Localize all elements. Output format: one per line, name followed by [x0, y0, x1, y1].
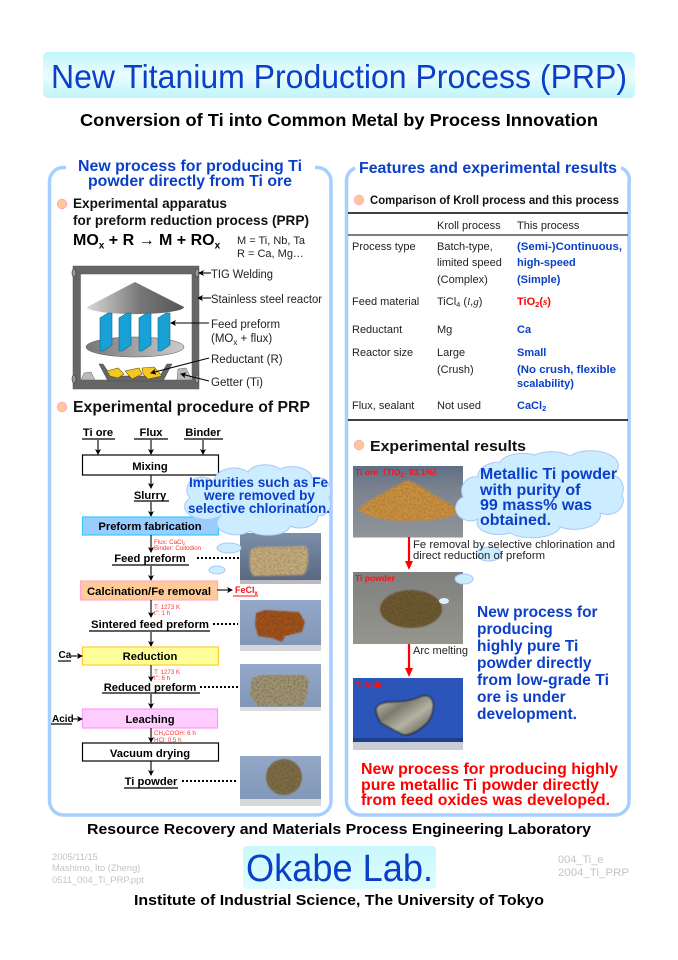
comparison table: Reactor size — [352, 347, 413, 359]
reactor diagram: + flux) — [237, 333, 272, 345]
comparison table: l,g) — [467, 296, 482, 308]
reactor diagram: Getter (Ti) — [211, 377, 263, 389]
panel heading — [78, 158, 302, 190]
flow chart: Ti ore — [83, 427, 113, 439]
photo: Ti powder — [353, 572, 463, 644]
flow chart: Acid — [52, 714, 74, 725]
flow chart: Leaching — [125, 714, 175, 726]
caption: Fe removal: direct reduction of preform — [413, 550, 545, 562]
text: process under development: highly pure Ti — [477, 638, 578, 655]
element key — [237, 235, 306, 260]
comparison table: Ca — [517, 324, 532, 336]
reaction equation: x — [215, 240, 221, 252]
laboratory name: Resource Recovery and Materials Process Engineering Laboratory — [87, 821, 592, 838]
element key: R = Ca, Mg… — [237, 248, 304, 260]
comparison table: 2 — [542, 404, 546, 413]
arrow: ore to powder — [405, 537, 413, 570]
callout: purity result: Metallic Ti powder — [480, 466, 617, 483]
procedure heading: Experimental procedure of PRP — [73, 399, 310, 416]
comparison table: (Simple) — [517, 274, 561, 286]
apparatus heading — [73, 195, 309, 228]
comparison table: Not used — [437, 400, 481, 412]
flow chart: Reduced preform — [104, 682, 196, 694]
title banner: New Titanium Production Process (PRP) — [51, 58, 627, 95]
caption: arc melting: Arc melting — [413, 645, 468, 657]
callout: purity result: obtained. — [480, 512, 551, 529]
comparison table: CaCl — [517, 400, 542, 412]
photo: Ti ore: : 93.1%） — [404, 467, 442, 477]
comparison table: TiO — [517, 296, 535, 308]
bullet — [57, 402, 67, 412]
comparison table: scalability) — [517, 378, 574, 390]
element key: M = Ti, Nb, Ta — [237, 235, 306, 247]
flow chart: T: 1273 K — [154, 604, 181, 611]
comparison table: Small — [517, 347, 546, 359]
panel: new process for producing Ti powder — [50, 158, 331, 815]
comparison table: s) — [543, 296, 551, 308]
reactor diagram: x — [233, 338, 237, 347]
flow chart: t'': 6 h — [154, 675, 171, 682]
file notes left: 2005/11/15 — [52, 852, 98, 862]
panel heading: New process for producing Ti — [78, 158, 302, 175]
comparison table: TiCl — [437, 296, 456, 308]
text: process under development — [477, 604, 609, 723]
callout: purity result — [456, 451, 623, 538]
flow chart: Slurry — [134, 490, 167, 502]
institute name: Institute of Industrial Science, The University of Tokyo — [134, 892, 544, 909]
reactor diagram: (MO — [211, 333, 233, 345]
bullet — [354, 195, 364, 205]
results heading: Experimental results — [370, 438, 526, 455]
flow chart: Feed preform — [114, 553, 186, 565]
text: process under development: New process for — [477, 604, 598, 621]
conclusion text: New process for producing highly — [361, 761, 618, 778]
Okabe Lab banner: Okabe Lab. — [246, 848, 433, 890]
reaction equation: + R — [104, 232, 139, 249]
comparison table: 4 — [456, 300, 460, 309]
comparison table: Mg — [437, 324, 452, 336]
flow chart: Flux: CaCl — [154, 539, 183, 546]
arrow: powder to bulk — [405, 644, 413, 677]
callout: selective chlorination: selective chlorination. — [188, 501, 330, 516]
file notes right: 2004_Ti_PRP — [558, 867, 629, 879]
caption: Fe removal — [413, 539, 615, 562]
text: process under development: from low-grade Ti — [477, 672, 609, 689]
flow chart: HCl: 0.5 h — [154, 737, 182, 744]
flow chart: Mixing — [132, 461, 168, 473]
file notes left — [52, 852, 144, 885]
comparison table — [348, 213, 628, 420]
flow chart: Binder: Collodion — [154, 545, 202, 552]
flow chart: x — [255, 591, 259, 597]
callout: selective chlorination — [185, 465, 331, 574]
callout: selective chlorination: were removed by — [203, 488, 315, 503]
bullet — [57, 199, 67, 209]
panel heading: Features and experimental results — [359, 160, 617, 177]
flow chart: Preform fabrication — [98, 521, 202, 533]
comparison table: limited speed — [437, 257, 502, 269]
comparison table: Large — [437, 347, 465, 359]
comparison table: This process — [517, 220, 580, 232]
file notes left: 0511_004_Ti_PRP.ppt — [52, 875, 144, 885]
flow chart: T: 1273 K — [154, 669, 181, 676]
comparison heading: Comparison of Kroll process and this process — [370, 195, 619, 207]
reactor diagram: TIG Welding — [211, 269, 273, 281]
conclusion text: pure metallic Ti powder directly — [361, 777, 599, 794]
reaction equation: → M + RO — [139, 232, 215, 249]
caption: Fe removal: Fe removal by selective chlorination and — [413, 539, 615, 551]
comparison table: (Crush) — [437, 364, 474, 376]
photo: Ti ore — [353, 466, 463, 538]
text: process under development: development. — [477, 706, 577, 723]
comparison table: high-speed — [517, 257, 576, 269]
flow chart: Calcination/Fe removal — [87, 586, 211, 598]
subtitle: Conversion of Ti into Common Metal by Process Innovation — [80, 110, 598, 130]
file notes right: 004_Ti_e — [558, 854, 603, 866]
flow chart: Reduction — [123, 651, 178, 663]
apparatus heading: Experimental apparatus — [73, 195, 227, 211]
panel heading: powder directly from Ti ore — [88, 173, 292, 190]
reactor diagram: Feed preform — [211, 319, 280, 331]
comparison table: Flux, sealant — [352, 400, 414, 412]
photo: Ti powder: Ti powder — [355, 573, 396, 583]
photo: reduced preform — [240, 664, 321, 711]
text: process under development: ore is under — [477, 689, 566, 706]
comparison table: Batch-type, — [437, 241, 493, 253]
text: process under development: producing — [477, 621, 553, 638]
callout tail bubbles over photo — [439, 574, 473, 604]
conclusion text — [361, 761, 618, 809]
comparison table: (No crush, flexible — [517, 364, 616, 376]
callout: purity result: with purity of — [479, 482, 581, 499]
comparison table: (Semi-)Continuous, — [517, 241, 622, 253]
flow chart: COOH: 6 h — [165, 730, 196, 737]
comparison table: Feed material — [352, 296, 419, 308]
photo: Ti bulk — [353, 678, 463, 750]
flow chart: CH — [154, 730, 163, 737]
comparison table: ( — [539, 296, 543, 308]
flow chart: Ti powder — [125, 776, 178, 788]
comparison table: Process type — [352, 241, 416, 253]
photo: Ti ore: Ti ore（TiO — [355, 467, 401, 477]
panel: features and experimental results — [346, 160, 629, 815]
photo: sintered feed preform — [240, 600, 321, 651]
callout: purity result: 99 mass% was — [480, 497, 592, 514]
comparison table: Kroll process — [437, 220, 501, 232]
flow chart: 3 — [163, 732, 166, 737]
flow chart: Ca — [58, 650, 72, 661]
photo: Ti ore: 2 — [401, 473, 405, 479]
flow chart — [51, 427, 259, 788]
comparison table: ( — [460, 296, 467, 308]
apparatus heading: for preform reduction process (PRP) — [73, 212, 309, 228]
reactor diagram: Stainless steel reactor — [211, 294, 322, 306]
reactor diagram: Reductant (R) — [211, 354, 283, 366]
flow chart: Sintered feed preform — [91, 619, 209, 631]
comparison table: (Complex) — [437, 274, 488, 286]
comparison table: Reductant — [352, 324, 402, 336]
callout: selective chlorination: Impurities such as Fe — [189, 475, 328, 490]
photo: Ti powder sample — [240, 756, 321, 806]
bullet — [354, 440, 364, 450]
photo: feed preform — [240, 533, 321, 584]
comparison table: 2 — [535, 300, 539, 309]
file notes right — [558, 854, 629, 879]
flow chart: Binder — [185, 427, 221, 439]
conclusion text: from feed oxides was developed. — [361, 792, 610, 809]
flow chart: Flux — [140, 427, 163, 439]
reaction equation: MO — [73, 232, 99, 249]
text: process under development: powder directly — [477, 655, 592, 672]
reactor diagram — [72, 266, 322, 389]
flow chart: Vacuum drying — [110, 748, 190, 760]
flow chart: t'': 1 h — [154, 610, 171, 617]
callout tail bubble — [476, 547, 502, 561]
file notes left: Mashimo, Ito (Zheng) — [52, 863, 140, 873]
reaction equation: x — [99, 240, 105, 252]
flow chart: 2 — [183, 541, 186, 546]
flow chart: FeCl — [235, 585, 255, 595]
photo: Ti bulk: Ti bulk — [355, 680, 383, 690]
